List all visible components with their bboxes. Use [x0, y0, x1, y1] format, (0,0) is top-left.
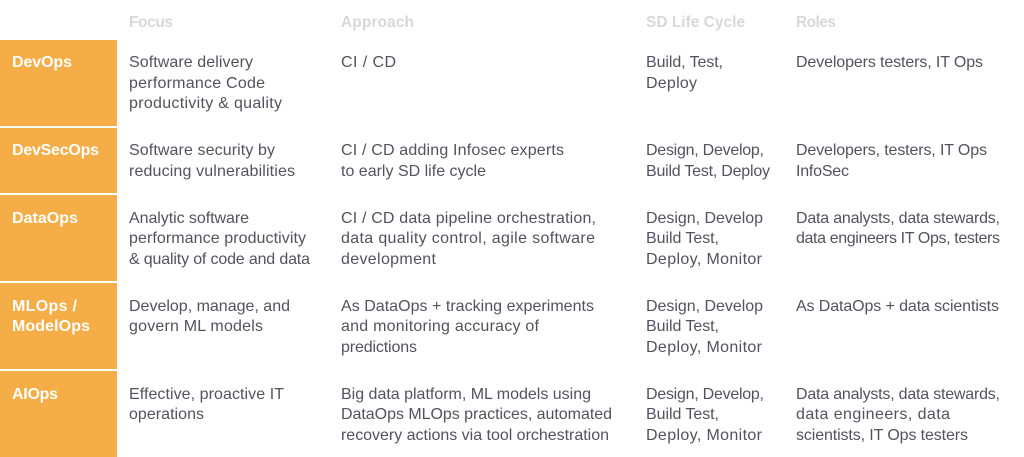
roles: AIOps: scientists, IT Ops testers	[796, 427, 968, 444]
column headers: Focus	[129, 14, 173, 31]
approach: DevOps: CI / CD	[341, 54, 396, 71]
approach: MLOps: and monitoring accuracy of	[341, 318, 540, 335]
column headers: Roles	[796, 14, 836, 31]
row: DataOps	[0, 195, 1000, 281]
roles: MLOps: As DataOps + data scientists	[796, 298, 999, 315]
approach: DataOps: data quality control, agile software	[341, 230, 595, 247]
column headers: SD Life Cycle	[646, 14, 745, 31]
focus: DevSecOps: reducing vulnerabilities	[129, 163, 295, 180]
focus: DataOps	[129, 210, 310, 268]
label: DevOps: DevOps	[12, 54, 72, 71]
life cycle: DevSecOps	[646, 142, 770, 180]
roles: DataOps: Data analysts, data stewards,	[796, 210, 1000, 227]
focus: MLOps	[129, 298, 290, 335]
life cycle: DevSecOps: Design, Develop,	[646, 142, 764, 159]
life cycle: MLOps	[646, 298, 763, 356]
label: DataOps	[0, 195, 117, 281]
roles: AIOps: data engineers, data	[796, 406, 950, 423]
approach: AIOps: recovery actions via tool orchestration	[341, 427, 609, 444]
row: MLOps / ModelOps	[0, 283, 999, 369]
row: AIOps	[0, 371, 1000, 457]
life cycle: DataOps: Design, Develop	[646, 210, 763, 227]
life cycle: DataOps: Build Test,	[646, 230, 719, 247]
life cycle: AIOps: Design, Develop,	[646, 386, 764, 403]
life cycle: AIOps: Deploy, Monitor	[646, 427, 763, 444]
roles: DevSecOps: Developers, testers, IT Ops	[796, 142, 987, 159]
label: DevSecOps: DevSecOps	[12, 142, 99, 159]
roles: DevSecOps	[796, 142, 987, 180]
life cycle: DevOps	[646, 54, 723, 92]
focus: DevOps	[129, 54, 282, 112]
label: MLOps / ModelOps	[0, 283, 117, 369]
life cycle: DevOps: Deploy	[646, 75, 697, 92]
label: DevSecOps	[0, 128, 117, 193]
focus: DevOps: Software delivery	[129, 54, 253, 71]
approach: MLOps: As DataOps + tracking experiments	[341, 298, 594, 315]
label: DataOps: DataOps	[12, 210, 78, 227]
focus: MLOps: govern ML models	[129, 318, 263, 335]
roles: DataOps	[796, 210, 1000, 247]
focus: DataOps: performance productivity	[129, 230, 306, 247]
focus: MLOps: Develop, manage, and	[129, 298, 290, 315]
row: DevOps	[0, 40, 983, 126]
life cycle: AIOps	[646, 386, 764, 444]
column headers: Approach	[341, 14, 414, 31]
focus: DevOps: productivity & quality	[129, 95, 282, 112]
approach: DevSecOps: to early SD life cycle	[341, 163, 486, 180]
label: DevOps	[0, 40, 117, 126]
approach: DevSecOps	[341, 142, 564, 180]
approach: MLOps: predictions	[341, 339, 417, 356]
focus: DevSecOps: Software security by	[129, 142, 275, 159]
focus: DevOps: performance Code	[129, 75, 265, 92]
life cycle: DevSecOps: Build Test, Deploy	[646, 163, 770, 180]
approach: DataOps: development	[341, 251, 437, 268]
column headers	[129, 14, 836, 31]
life cycle: MLOps: Design, Develop	[646, 298, 763, 315]
label: AIOps	[0, 371, 117, 457]
approach: DataOps	[341, 210, 596, 268]
focus: DataOps: & quality of code and data	[129, 251, 310, 268]
focus: AIOps: Effective, proactive IT	[129, 386, 284, 403]
life cycle: MLOps: Build Test,	[646, 318, 719, 335]
life cycle: AIOps: Build Test,	[646, 406, 719, 423]
approach: DataOps: CI / CD data pipeline orchestration,	[341, 210, 596, 227]
life cycle: DevOps: Build, Test,	[646, 54, 723, 71]
label: MLOps / ModelOps: ModelOps	[12, 318, 90, 335]
focus: DevSecOps	[129, 142, 295, 180]
life cycle: DataOps	[646, 210, 763, 268]
approach: AIOps: Big data platform, ML models using	[341, 386, 591, 403]
roles: AIOps	[796, 386, 1000, 444]
roles: DataOps: data engineers IT Ops, testers	[796, 230, 1000, 247]
life cycle: MLOps: Deploy, Monitor	[646, 339, 763, 356]
approach: MLOps	[341, 298, 594, 356]
life cycle: DataOps: Deploy, Monitor	[646, 251, 763, 268]
label: AIOps: AIOps	[12, 386, 58, 403]
roles: DevOps: Developers testers, IT Ops	[796, 54, 983, 71]
row: DevSecOps	[0, 128, 987, 193]
focus: AIOps	[129, 386, 284, 423]
approach: DevSecOps: CI / CD adding Infosec experts	[341, 142, 564, 159]
roles: DevSecOps: InfoSec	[796, 163, 849, 180]
label: MLOps / ModelOps: MLOps /	[12, 298, 78, 315]
focus: AIOps: operations	[129, 406, 204, 423]
approach: AIOps	[341, 386, 612, 444]
focus: DataOps: Analytic software	[129, 210, 249, 227]
approach: AIOps: DataOps MLOps practices, automated	[341, 406, 612, 423]
roles: AIOps: Data analysts, data stewards,	[796, 386, 1000, 403]
